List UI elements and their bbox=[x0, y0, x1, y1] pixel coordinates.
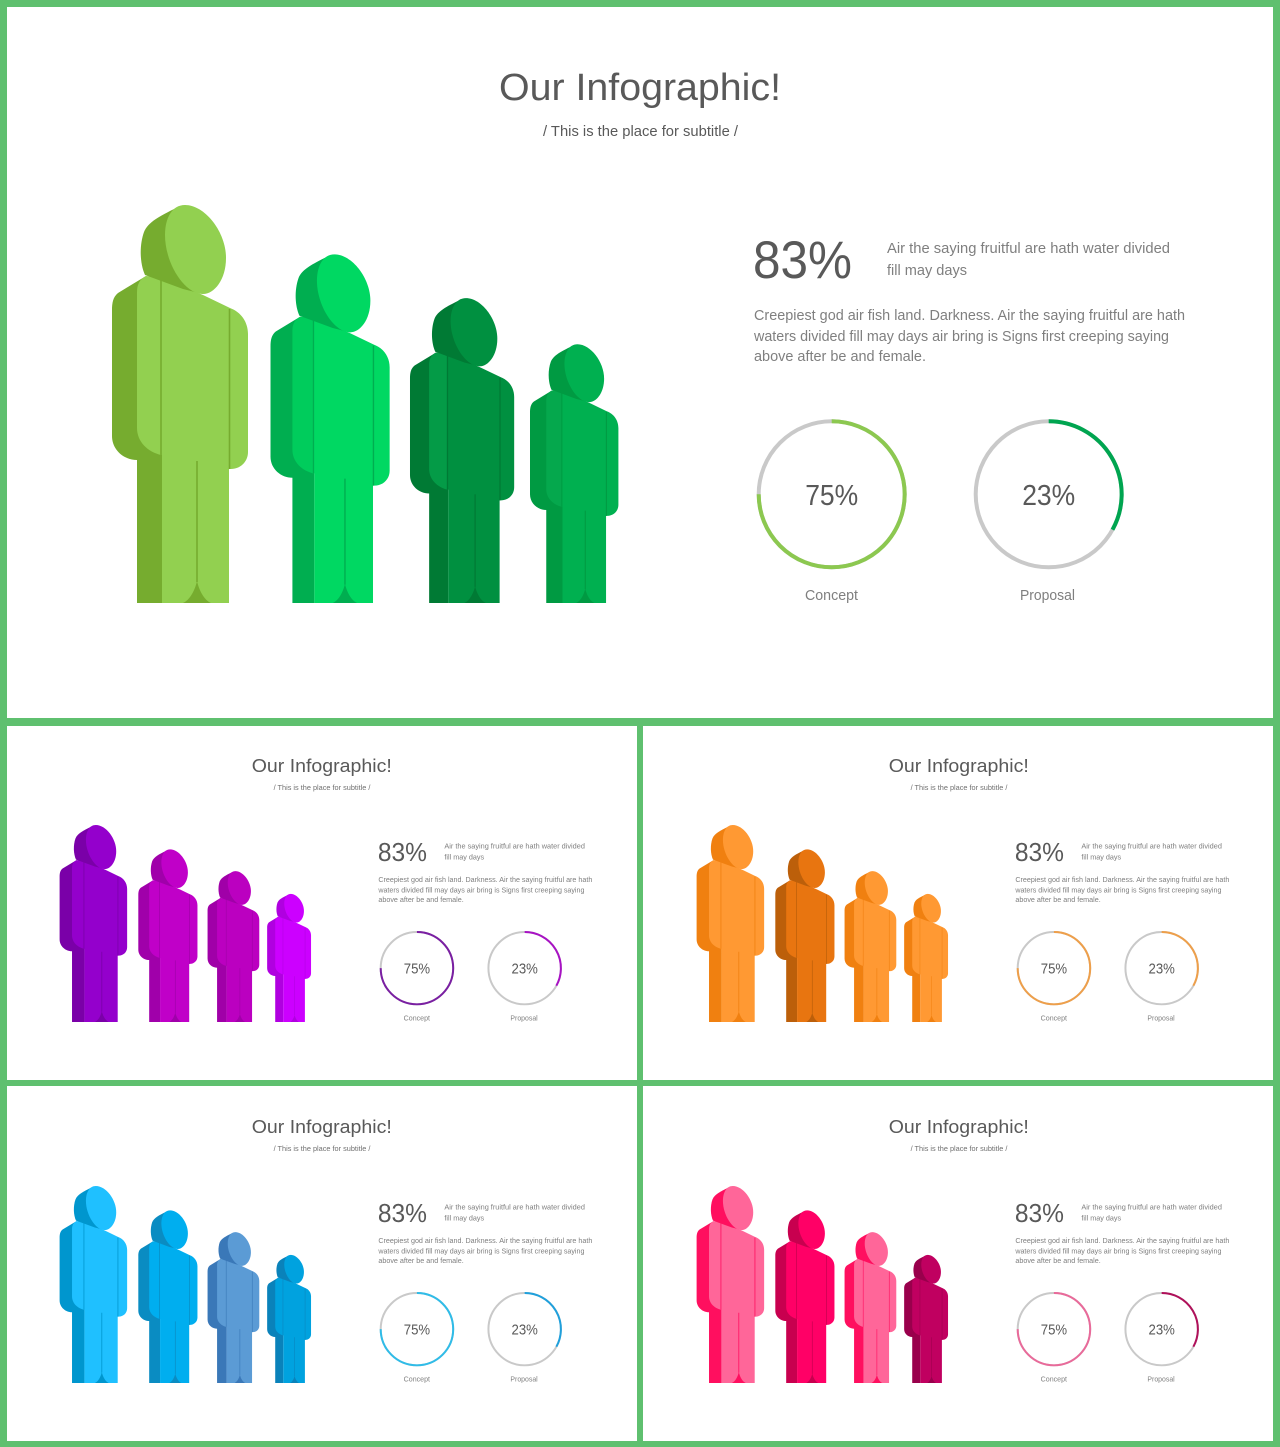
paragraph bbox=[377, 1236, 592, 1265]
ring: concept 75%: Concept bbox=[1041, 1015, 1067, 1022]
title: Our Infographic! bbox=[252, 755, 392, 776]
ring: concept 75% bbox=[1018, 1293, 1090, 1383]
ring: proposal 23%: Proposal bbox=[1147, 1376, 1175, 1383]
paragraph: Creepiest god air fish land. Darkness. Air the saying fruitful are hath bbox=[1015, 1236, 1229, 1245]
ring: concept 75% bbox=[381, 932, 453, 1022]
short description: fill may days bbox=[1081, 1214, 1121, 1223]
ring: concept 75%: 75% bbox=[805, 480, 858, 512]
ring: proposal 23% bbox=[488, 1293, 561, 1383]
paragraph bbox=[1014, 1236, 1229, 1265]
short description bbox=[1081, 842, 1222, 862]
paragraph: waters divided fill may days air bring is Signs first creeping saying bbox=[377, 885, 584, 894]
paragraph bbox=[377, 875, 592, 904]
short description bbox=[444, 1203, 585, 1223]
ring: concept 75% bbox=[1018, 932, 1090, 1022]
ring: proposal 23%: Proposal bbox=[1020, 588, 1075, 604]
panel: pink slide bbox=[643, 1086, 1273, 1441]
paragraph: Creepiest god air fish land. Darkness. Air the saying fruitful are hath bbox=[378, 875, 592, 884]
paragraph: Creepiest god air fish land. Darkness. Air the saying fruitful are hath bbox=[1015, 875, 1229, 884]
big number: 83% bbox=[378, 837, 427, 867]
paragraph: above after be and female. bbox=[378, 895, 464, 904]
short description: Air the saying fruitful are hath water divided bbox=[444, 1203, 585, 1212]
title: Our Infographic! bbox=[499, 67, 781, 109]
panel: blue slide bbox=[7, 1086, 637, 1441]
subtitle: / This is the place for subtitle / bbox=[911, 1145, 1007, 1153]
ring: concept 75% bbox=[381, 1293, 453, 1383]
paragraph bbox=[753, 307, 1185, 365]
ring: proposal 23%: 23% bbox=[1149, 1322, 1175, 1338]
ring: proposal 23%: 23% bbox=[512, 1322, 538, 1338]
paragraph: waters divided fill may days air bring is Signs first creeping saying bbox=[1014, 1246, 1221, 1255]
ring: concept 75% bbox=[759, 421, 905, 604]
short description: fill may days bbox=[887, 262, 967, 279]
panel: large green slide bbox=[7, 7, 1273, 718]
ring: concept 75%: 75% bbox=[404, 961, 430, 977]
panel: purple slide bbox=[7, 726, 637, 1080]
subtitle: / This is the place for subtitle / bbox=[274, 784, 370, 792]
ring: proposal 23% bbox=[1125, 1293, 1198, 1383]
ring: concept 75%: Concept bbox=[404, 1376, 430, 1383]
big number: 83% bbox=[1015, 837, 1064, 867]
short description: Air the saying fruitful are hath water divided bbox=[1081, 1203, 1222, 1212]
short description: fill may days bbox=[1081, 853, 1121, 862]
ring: concept 75%: Concept bbox=[404, 1015, 430, 1022]
ring: proposal 23%: Proposal bbox=[510, 1015, 538, 1022]
title: Our Infographic! bbox=[889, 1116, 1029, 1137]
big number: 83% bbox=[753, 231, 852, 290]
short description: fill may days bbox=[444, 1214, 484, 1223]
ring: concept 75%: 75% bbox=[1041, 961, 1067, 977]
paragraph: Creepiest god air fish land. Darkness. Air the saying fruitful are hath bbox=[378, 1236, 592, 1245]
title: Our Infographic! bbox=[252, 1116, 392, 1137]
subtitle: / This is the place for subtitle / bbox=[911, 784, 1007, 792]
paragraph: waters divided fill may days air bring is Signs first creeping saying bbox=[753, 328, 1169, 345]
short description: Air the saying fruitful are hath water divided bbox=[444, 842, 585, 851]
title: Our Infographic! bbox=[889, 755, 1029, 776]
ring: proposal 23% bbox=[976, 421, 1122, 604]
ring: proposal 23% bbox=[488, 932, 561, 1022]
chart: four pink people bbox=[697, 1186, 948, 1383]
short description: Air the saying fruitful are hath water divided bbox=[1081, 842, 1222, 851]
paragraph: above after be and female. bbox=[754, 348, 926, 365]
ring: concept 75%: 75% bbox=[404, 1322, 430, 1338]
ring: proposal 23%: 23% bbox=[1022, 480, 1075, 512]
paragraph: Creepiest god air fish land. Darkness. Air the saying fruitful are hath bbox=[754, 307, 1185, 324]
subtitle: / This is the place for subtitle / bbox=[543, 124, 739, 140]
ring: proposal 23%: Proposal bbox=[510, 1376, 538, 1383]
ring: concept 75%: Concept bbox=[805, 588, 858, 604]
paragraph: waters divided fill may days air bring is Signs first creeping saying bbox=[377, 1246, 584, 1255]
ring: concept 75%: Concept bbox=[1041, 1376, 1067, 1383]
big number: 83% bbox=[1015, 1198, 1064, 1228]
paragraph: above after be and female. bbox=[378, 1256, 464, 1265]
paragraph: above after be and female. bbox=[1015, 895, 1101, 904]
ring: proposal 23% bbox=[1125, 932, 1198, 1022]
ring: proposal 23%: 23% bbox=[512, 961, 538, 977]
paragraph bbox=[1014, 875, 1229, 904]
chart: four green people bbox=[112, 205, 618, 603]
ring: concept 75%: 75% bbox=[1041, 1322, 1067, 1338]
chart: four blue people bbox=[60, 1186, 311, 1383]
chart: four purple people bbox=[60, 825, 311, 1022]
panel: orange slide bbox=[643, 726, 1273, 1080]
paragraph: above after be and female. bbox=[1015, 1256, 1101, 1265]
short description: fill may days bbox=[444, 853, 484, 862]
ring: proposal 23%: 23% bbox=[1149, 961, 1175, 977]
ring: proposal 23%: Proposal bbox=[1147, 1015, 1175, 1022]
short description bbox=[887, 240, 1170, 279]
short description: Air the saying fruitful are hath water divided bbox=[887, 240, 1170, 257]
subtitle: / This is the place for subtitle / bbox=[274, 1145, 370, 1153]
paragraph: waters divided fill may days air bring is Signs first creeping saying bbox=[1014, 885, 1221, 894]
short description bbox=[1081, 1203, 1222, 1223]
short description bbox=[444, 842, 585, 862]
big number: 83% bbox=[378, 1198, 427, 1228]
chart: four orange people bbox=[697, 825, 948, 1022]
